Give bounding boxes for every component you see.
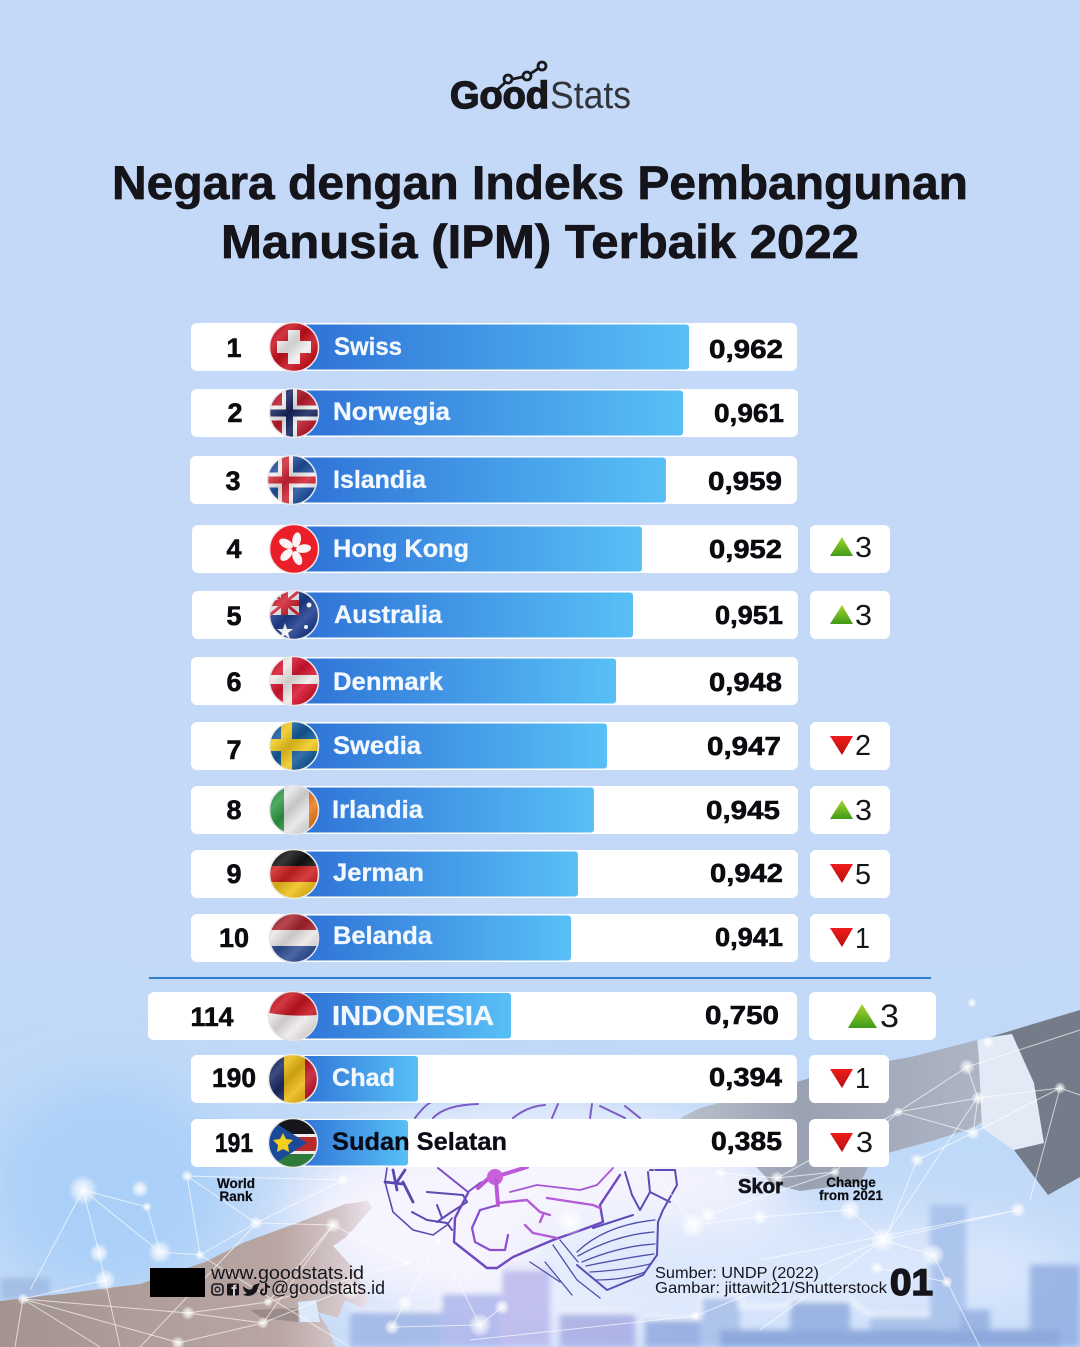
row: Jerman: 0,942 — [710, 858, 783, 888]
flag: Germany — [270, 850, 318, 898]
row: Norwegia: 0,961 — [714, 398, 784, 428]
flag: Indonesia — [269, 992, 317, 1040]
logo: trend line icon — [497, 62, 546, 90]
row: Irlandia: 0,945 — [706, 795, 780, 825]
row: Jerman — [191, 850, 890, 898]
change: up 3 — [810, 525, 890, 573]
column label: World Rank: Rank — [219, 1189, 253, 1204]
column label: Change from 2021: from 2021 — [819, 1188, 883, 1203]
row: Islandia — [190, 456, 797, 504]
row: Chad: 190 — [212, 1063, 256, 1093]
change: down 2 — [810, 722, 890, 770]
column label: World Rank: World — [217, 1176, 255, 1191]
flag: Sweden — [270, 722, 318, 770]
title: Manusia (IPM) Terbaik 2022 — [221, 215, 859, 268]
row: Denmark: 6 — [226, 667, 242, 697]
footer: source: Sumber: UNDP (2022) — [655, 1265, 819, 1282]
change: down 1 — [810, 914, 890, 962]
change: up 3: 3 — [855, 532, 872, 564]
title: Negara dengan Indeks Pembangunan — [112, 156, 968, 209]
row: Australia: 5 — [226, 601, 242, 631]
change: down 1 — [809, 1055, 889, 1103]
divider line — [149, 977, 931, 979]
row: Belanda: 0,941 — [715, 922, 783, 952]
background: network lines — [15, 1030, 1080, 1347]
row: Swiss — [191, 322, 797, 372]
row: Irlandia: Irlandia — [332, 796, 424, 824]
flag: Australia — [270, 591, 318, 639]
row: Indonesia: 114 — [190, 1002, 234, 1032]
illustration: brain — [385, 1103, 677, 1298]
logo: GoodStats: Good — [450, 75, 549, 117]
flag: Norway — [270, 389, 318, 437]
row: Jerman: Jerman — [333, 859, 424, 887]
row: Swiss: 0,962 — [709, 334, 783, 364]
flag: South Sudan — [269, 1119, 317, 1167]
row: Swedia — [191, 722, 890, 770]
flag: Hong Kong — [270, 525, 318, 573]
change: up 3 large: 3 — [880, 998, 899, 1034]
footer: website and social: www.goodstats.id — [210, 1263, 364, 1283]
change: up 3 — [810, 786, 890, 834]
row: Islandia: 3 — [225, 466, 241, 496]
row: Hong Kong — [192, 524, 890, 574]
row: Islandia: Islandia — [333, 466, 427, 494]
change: up 3 — [810, 591, 890, 639]
footer: source — [655, 1265, 888, 1297]
row: Hong Kong: 0,952 — [709, 534, 782, 564]
flag: Switzerland — [270, 323, 318, 371]
illustration: left hand — [0, 1201, 372, 1347]
row: Swedia: Swedia — [333, 732, 422, 760]
row: Belanda — [191, 914, 890, 962]
row: Irlandia — [191, 786, 890, 834]
title — [112, 156, 968, 268]
background: city skyline — [0, 1205, 1080, 1347]
flag: Chad — [269, 1055, 317, 1103]
row: Norwegia: Norwegia — [333, 398, 451, 426]
row: Norwegia — [191, 388, 798, 438]
change: up 3: 3 — [855, 600, 872, 632]
row: Swiss: Swiss — [334, 333, 402, 361]
logo: GoodStats: Stats — [550, 75, 631, 117]
flag: Ireland — [270, 786, 318, 834]
row: Islandia: 0,959 — [708, 466, 782, 496]
flag: Denmark — [270, 657, 318, 705]
footer: source: Gambar: jittawit21/Shutterstock — [655, 1280, 888, 1297]
change: down 5 — [810, 850, 890, 898]
row: Chad: Chad — [332, 1064, 395, 1092]
row: Belanda: 10 — [219, 923, 249, 953]
row: Sudan Selatan: 191 — [215, 1128, 253, 1158]
row: Denmark: 0,948 — [709, 667, 782, 697]
row: Hong Kong: Hong Kong — [333, 535, 469, 563]
row: Swedia: 0,947 — [707, 731, 781, 761]
row: Irlandia: 8 — [226, 795, 242, 825]
row: Hong Kong: 4 — [226, 534, 242, 564]
row: Belanda: Belanda — [333, 922, 433, 950]
page number: 01 — [890, 1262, 933, 1303]
change: up 3 large — [809, 992, 936, 1040]
row: Swiss: 1 — [226, 333, 242, 363]
column label: Change from 2021: Change — [826, 1175, 876, 1190]
row: Australia — [192, 590, 890, 640]
row: Jerman: 9 — [226, 859, 242, 889]
change: down 1: 1 — [855, 1063, 870, 1095]
change: down 1: 1 — [855, 923, 870, 955]
row: Chad: 0,394 — [709, 1062, 783, 1092]
change: up 3: 3 — [855, 795, 872, 827]
footer: website and social: @goodstats.id — [271, 1278, 385, 1298]
change: down 2: 2 — [855, 730, 871, 762]
footer: website and social — [210, 1263, 385, 1298]
logo: GoodStats — [450, 62, 631, 117]
row: Norwegia: 2 — [227, 398, 243, 428]
row: Denmark: Denmark — [333, 668, 443, 696]
row: Indonesia: 0,750 — [705, 1000, 779, 1030]
flag: Iceland — [268, 456, 316, 504]
row: Chad — [191, 1054, 889, 1104]
flag: Netherlands — [270, 914, 318, 962]
row: Sudan Selatan — [191, 1118, 889, 1168]
row: Sudan Selatan: 0,385 — [711, 1126, 782, 1156]
change: down 5: 5 — [855, 859, 871, 891]
background: network nodes — [17, 998, 1066, 1347]
change: down 3 — [809, 1119, 889, 1167]
row: Denmark — [191, 656, 798, 706]
row: Sudan Selatan: Sudan Selatan — [332, 1128, 507, 1156]
row: Australia: 0,951 — [715, 600, 783, 630]
row: Swedia: 7 — [226, 735, 242, 765]
row: Indonesia — [148, 992, 936, 1040]
social icons — [212, 1283, 270, 1296]
change: down 3: 3 — [856, 1127, 873, 1159]
row: Australia: Australia — [334, 601, 443, 629]
column label: Change from 2021 — [819, 1175, 883, 1203]
footer: black box — [150, 1268, 205, 1297]
column label: World Rank — [217, 1176, 255, 1204]
column label: Skor: Skor — [738, 1176, 783, 1198]
illustration: right hand and sleeve — [680, 1010, 1080, 1195]
row: Indonesia: INDONESIA — [332, 1000, 494, 1031]
